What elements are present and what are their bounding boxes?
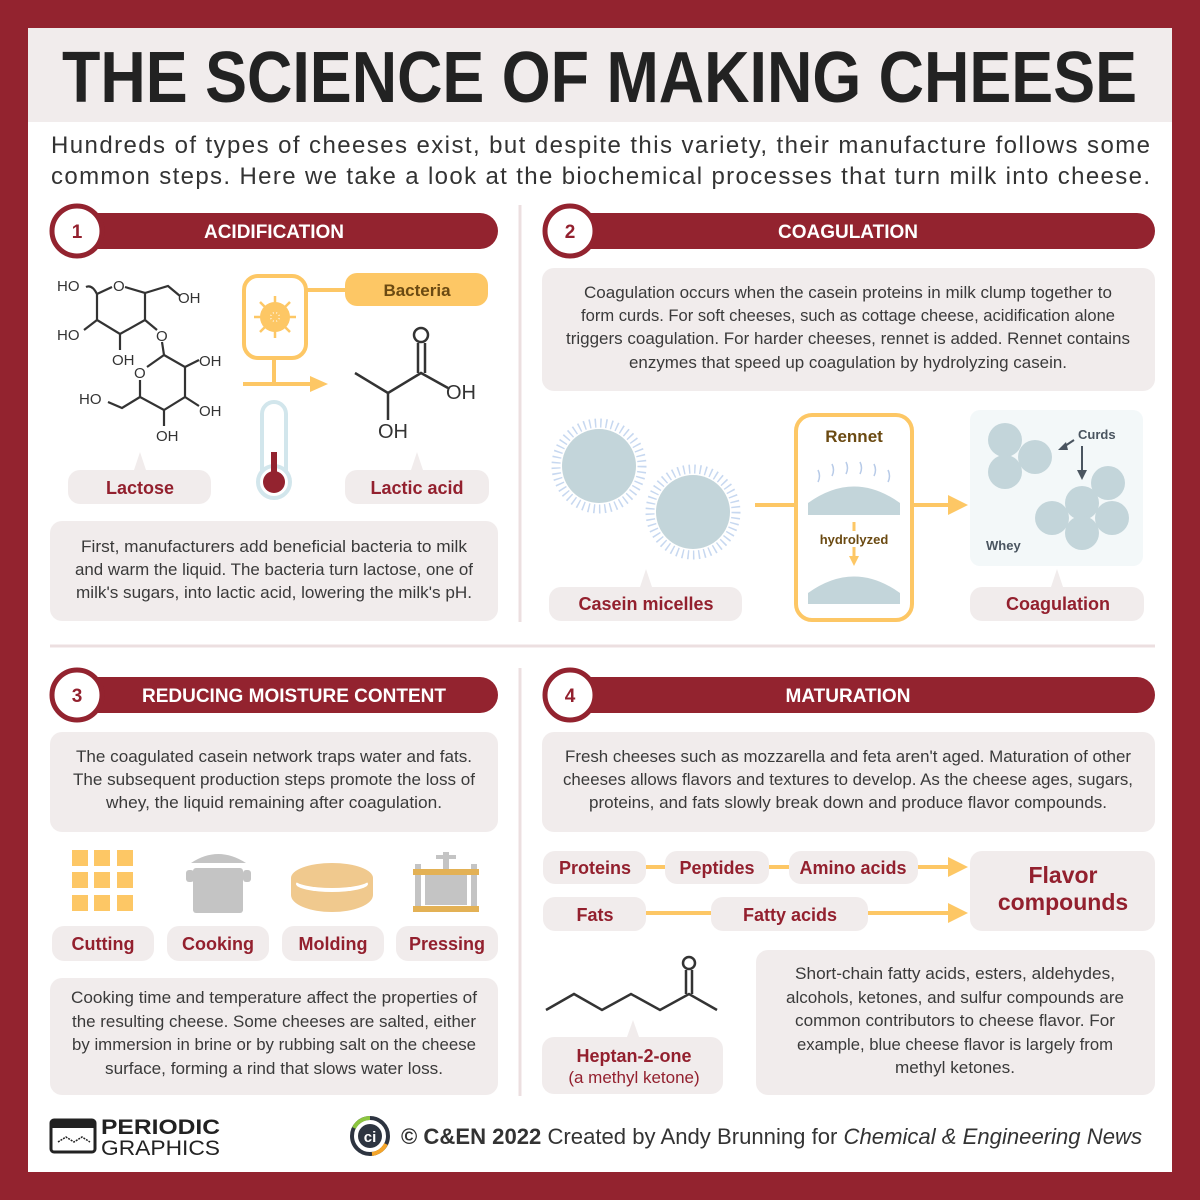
- label: heptan-2-one: (a methyl ketone): [568, 1068, 700, 1087]
- text: acidification description: milk's sugars, into lactic acid, lowering the milk's pH.: [76, 584, 472, 602]
- footer: credit: © C&EN 2022 Created by Andy Brunning for Chemical & Engineering News: [401, 1124, 1142, 1149]
- labels: moisture steps: Cutting: [72, 934, 134, 954]
- heading: 4 maturation: MATURATION: [786, 686, 910, 707]
- text: flavor compounds description: [756, 950, 1155, 1095]
- icon: casein micelles: [556, 423, 736, 555]
- flow: breakdown to flavor compounds: Amino acids: [799, 858, 907, 878]
- heading: 2 coagulation: [545, 206, 1155, 256]
- text: cooking description: Cooking time and temperature affect the properties of: [71, 989, 477, 1007]
- flow: breakdown to flavor compounds: Proteins: [559, 858, 631, 878]
- footer: credit: ci: [364, 1129, 376, 1146]
- icon: curds and whey: Whey: [986, 538, 1021, 553]
- text: cooking description: surface, forming a rind that slows water loss.: [105, 1060, 443, 1078]
- heading: 1 acidification: [52, 206, 498, 256]
- lactic acid structure: OH: [378, 421, 408, 443]
- text: acidification description: and warm the liquid. The bacteria turn lactose, one of: [75, 561, 473, 579]
- lactose structure: HO: [57, 327, 80, 344]
- label: lactic acid: [345, 452, 489, 504]
- label: heptan-2-one: Heptan-2-one: [576, 1046, 692, 1066]
- heading: 1 acidification: 1: [72, 222, 83, 243]
- icon: curds and whey: [970, 410, 1143, 566]
- text: coagulation description: triggers coagulation. For harder cheeses, rennet is added. Rennet contains: [566, 330, 1130, 348]
- label: coagulation: [970, 569, 1144, 621]
- flow: breakdown to flavor compounds: compounds: [998, 889, 1128, 915]
- text: coagulation description: form curds. For soft cheeses, such as cottage cheese, acidification alone: [581, 307, 1115, 325]
- lactose structure: OH: [178, 290, 200, 307]
- rennet box: hydrolyzed: [820, 532, 888, 547]
- heptan-2-one structure: [546, 957, 717, 1010]
- panel: coagulation: [542, 206, 1155, 621]
- label: lactose: Lactose: [106, 478, 174, 498]
- heading: 4 maturation: [545, 670, 1155, 720]
- lactose structure: O: [156, 328, 168, 345]
- heading: 3 reducing moisture: 3: [72, 686, 82, 707]
- text: flavor compounds description: methyl ketones.: [895, 1059, 1015, 1077]
- lactose structure: HO: [57, 278, 80, 295]
- rennet box: [796, 415, 912, 620]
- text: flavor compounds description: common contributors to cheese flavor. For: [795, 1012, 1116, 1030]
- footer: periodic graphics logo: PERIODIC: [101, 1116, 220, 1139]
- text: moisture description: The subsequent production steps promote the loss of: [73, 771, 475, 789]
- text: acidification description: First, manufacturers add beneficial bacteria to milk: [81, 538, 468, 556]
- intro text: common steps. Here we take a look at the biochemical processes that turn milk into cheese.: [51, 163, 1150, 190]
- intro text: Hundreds of types of cheeses exist, but despite this variety, their manufacture follows some: [51, 132, 1150, 159]
- heading: 3 reducing moisture: REDUCING MOISTURE CONTENT: [142, 686, 446, 707]
- label: heptan-2-one: [542, 1020, 723, 1094]
- lactose structure: [57, 278, 222, 445]
- flow: breakdown to flavor compounds: Flavor: [1028, 862, 1098, 888]
- text: flavor compounds description: alcohols, ketones, and sulfur compounds are: [786, 989, 1124, 1007]
- text: moisture description: whey, the liquid remaining after coagulation.: [105, 794, 442, 812]
- icon: bacteria box: [243, 276, 345, 392]
- panel: reducing moisture content: [50, 670, 498, 1095]
- icon: cooking pot: [186, 854, 251, 913]
- lactose structure: OH: [199, 403, 222, 420]
- heading: 1 acidification: ACIDIFICATION: [204, 222, 344, 243]
- flow: breakdown to flavor compounds: Fats: [576, 905, 614, 925]
- labels: moisture steps: [52, 926, 498, 961]
- icon: thermometer: [258, 402, 290, 498]
- footer: credit: [352, 1118, 1142, 1154]
- text: cooking description: [50, 978, 498, 1095]
- flow: breakdown to flavor compounds: Fatty acids: [743, 905, 837, 925]
- label: casein micelles: [549, 569, 742, 621]
- text: coagulation description: enzymes that speed up coagulation by hydrolyzing casein.: [629, 354, 1067, 372]
- icon: molding: [291, 863, 373, 912]
- text: coagulation description: Coagulation occurs when the casein proteins in milk clump together to: [584, 284, 1112, 302]
- icon: pressing: [413, 852, 479, 912]
- bacteria label: Bacteria: [383, 281, 451, 300]
- text: acidification description: [50, 521, 498, 621]
- rennet box: Rennet: [825, 427, 883, 446]
- label: lactic acid: Lactic acid: [370, 478, 464, 498]
- panel: acidification: [50, 206, 498, 621]
- lactic acid structure: [355, 328, 476, 443]
- lactose structure: OH: [199, 353, 222, 370]
- flow: breakdown to flavor compounds: [543, 851, 1155, 931]
- label: casein micelles: Casein micelles: [578, 594, 714, 614]
- text: maturation description: [542, 732, 1155, 832]
- footer: periodic graphics logo: [51, 1116, 220, 1160]
- lactic acid structure: OH: [446, 382, 476, 404]
- icon: curds and whey: Curds: [1078, 427, 1116, 442]
- icon: cutting: [72, 850, 133, 911]
- lactose structure: O: [134, 365, 146, 382]
- text: moisture description: The coagulated casein network traps water and fats.: [76, 748, 472, 766]
- text: cooking description: the resulting cheese. Some cheeses are salted, either: [72, 1013, 477, 1031]
- text: maturation description: cheeses allows flavors and textures to develop. As the cheese ages, sugars,: [563, 771, 1133, 789]
- text: flavor compounds description: Short-chain fatty acids, esters, aldehydes,: [795, 965, 1115, 983]
- lactose structure: OH: [156, 428, 178, 445]
- lactose structure: O: [113, 278, 125, 295]
- text: maturation description: Fresh cheeses such as mozzarella and feta aren't aged. Maturation of other: [565, 748, 1132, 766]
- footer: periodic graphics logo: GRAPHICS: [101, 1137, 220, 1160]
- label: lactose: [68, 452, 211, 504]
- panel: maturation: [542, 670, 1155, 1095]
- label: coagulation: Coagulation: [1006, 594, 1110, 614]
- lactose structure: HO: [79, 391, 102, 408]
- text: flavor compounds description: example, blue cheese flavor is largely from: [797, 1036, 1113, 1054]
- labels: moisture steps: Molding: [299, 934, 367, 954]
- text: moisture description: [50, 732, 498, 832]
- text: coagulation description: [542, 268, 1155, 391]
- arrow: rennet process: [755, 495, 968, 515]
- heading: 3 reducing moisture: [52, 670, 498, 720]
- flow: breakdown to flavor compounds: Peptides: [679, 858, 755, 878]
- text: cooking description: by immersion in brine or by rubbing salt on the cheese: [72, 1036, 476, 1054]
- intro text: [51, 132, 1150, 190]
- heading: 4 maturation: 4: [565, 686, 576, 707]
- heading: 2 coagulation: COAGULATION: [778, 222, 918, 243]
- text: maturation description: proteins, and fats slowly break down and produce flavor compounds.: [589, 794, 1107, 812]
- bacteria label: [345, 273, 488, 306]
- labels: moisture steps: Pressing: [409, 934, 485, 954]
- heading: 2 coagulation: 2: [565, 222, 575, 243]
- lactose structure: OH: [112, 352, 134, 369]
- labels: moisture steps: Cooking: [182, 934, 254, 954]
